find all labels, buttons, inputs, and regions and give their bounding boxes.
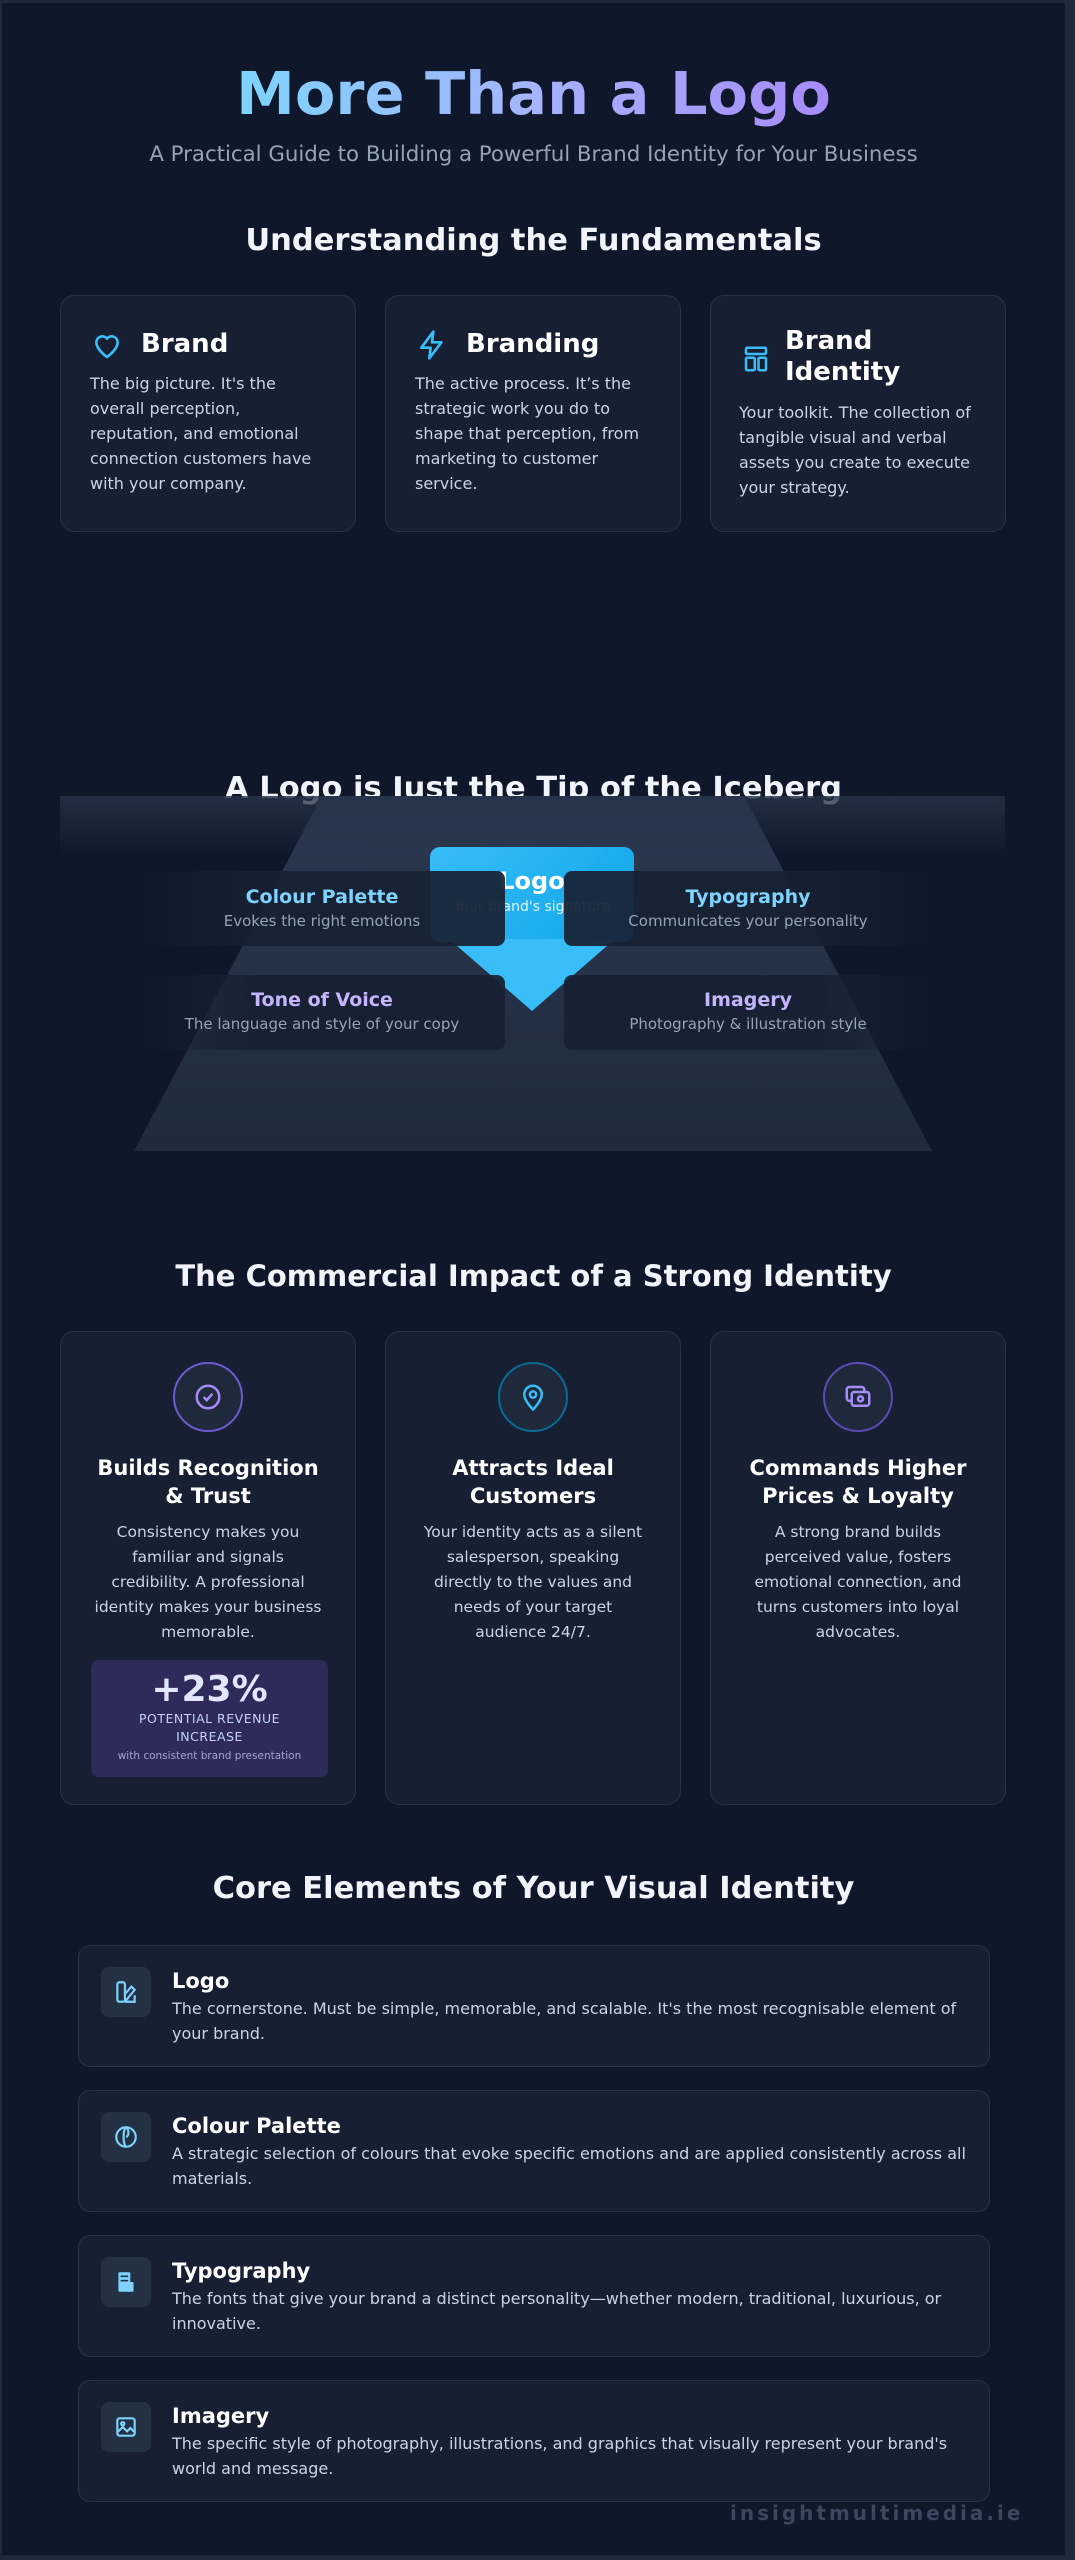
card: recognition: familiar and signals [132, 1548, 284, 1566]
item: colour palette: A strategic selection of colours that evoke specific emotions and are applied consistently across all materials. [172, 2144, 966, 2188]
logo tip: Logo [499, 867, 565, 895]
card: attracts customers: directly to the values and [434, 1573, 632, 1591]
stat box: with consistent brand presentation [118, 1750, 301, 1762]
item: imagery [78, 2380, 990, 2502]
icon: image [101, 2402, 151, 2452]
card: higher prices: Prices & Loyalty [762, 1484, 954, 1508]
icon: check circle [173, 1362, 243, 1432]
card: attracts customers: audience 24/7. [475, 1623, 591, 1641]
item: colour palette: Colour Palette [172, 2114, 341, 2138]
card: branding: The active process. It’s the strategic work you do to shape that perception, from marketing to customer service. [415, 374, 639, 493]
card: brand: Brand [141, 329, 228, 359]
icon: bolt [420, 330, 443, 360]
card: branding: Branding [466, 329, 599, 359]
heading: iceberg: A Logo is Just the Tip of the Iceberg [225, 771, 842, 806]
icon: map pin [498, 1362, 568, 1432]
icon: palette [101, 2112, 151, 2162]
arrow down [453, 939, 611, 1011]
card: brand [60, 295, 356, 532]
card: recognition [60, 1331, 356, 1805]
subtitle: A Practical Guide to Building a Powerful Brand Identity for Your Business [149, 142, 918, 167]
iceberg diagram: Typography [685, 886, 811, 908]
stat box: +23% [151, 1669, 268, 1710]
card: brand identity: Your toolkit. The collection of tangible visual and verbal assets you create to execute your strategy. [739, 403, 971, 497]
card: higher prices: turns customers into loyal [757, 1598, 959, 1616]
card: branding [385, 295, 681, 532]
card: higher prices [710, 1331, 1006, 1805]
card: attracts customers: Customers [470, 1484, 596, 1508]
iceberg diagram: Evokes the right emotions [224, 912, 420, 930]
item: logo: Logo [172, 1969, 229, 1993]
iceberg diagram: Colour Palette [246, 886, 398, 908]
item: logo [78, 1945, 990, 2067]
iceberg diagram: Photography & illustration style [629, 1015, 867, 1033]
card: attracts customers: salesperson, speaking [447, 1548, 619, 1566]
card: recognition: & Trust [165, 1484, 251, 1508]
icon: layout [744, 346, 768, 372]
title: More Than a Logo [236, 59, 831, 128]
card: attracts customers: needs of your target [454, 1598, 612, 1616]
card: recognition: memorable. [161, 1623, 255, 1641]
item: colour palette [78, 2090, 990, 2212]
card: recognition: identity makes your business [95, 1598, 321, 1616]
card: recognition: Consistency makes you [117, 1523, 299, 1541]
card: higher prices: emotional connection, and [755, 1573, 961, 1591]
iceberg diagram: Imagery [704, 989, 792, 1011]
stat box: POTENTIAL REVENUE [139, 1711, 280, 1726]
card: higher prices: A strong brand builds [775, 1523, 941, 1541]
heading: commercial impact: The Commercial Impact of a Strong Identity [175, 1259, 892, 1293]
item: imagery: Imagery [172, 2404, 269, 2428]
item: typography: Typography [172, 2259, 310, 2283]
card: recognition: Builds Recognition [97, 1456, 319, 1480]
label: tone of voice [137, 975, 505, 1050]
card: attracts customers: Your identity acts as a silent [424, 1523, 642, 1541]
heading: core elements: Core Elements of Your Visual Identity [213, 1871, 854, 1906]
iceberg diagram [60, 796, 1005, 1151]
watermark: insightmultimedia.ie [730, 2501, 1023, 2525]
card: brand: The big picture. It's the overall perception, reputation, and emotional connection customers have with your company. [90, 374, 311, 493]
card: brand identity [710, 295, 1006, 532]
iceberg diagram: The language and style of your copy [185, 1015, 459, 1033]
item: logo: The cornerstone. Must be simple, memorable, and scalable. It's the most recognisable element of your brand. [172, 1999, 956, 2043]
card: higher prices: perceived value, fosters [765, 1548, 951, 1566]
label: colour palette [137, 871, 505, 946]
card: attracts customers: Attracts Ideal [452, 1456, 614, 1480]
label: typography [564, 871, 934, 946]
icon: typography [101, 2257, 151, 2307]
card: higher prices: advocates. [816, 1623, 900, 1641]
heading: fundamentals: Understanding the Fundamentals [245, 223, 822, 258]
card: recognition: credibility. A professional [111, 1573, 305, 1591]
item: typography [78, 2235, 990, 2357]
icon: money [823, 1362, 893, 1432]
iceberg diagram: Tone of Voice [251, 989, 393, 1011]
card: higher prices: Commands Higher [750, 1456, 966, 1480]
stat box [91, 1660, 328, 1777]
iceberg diagram: Communicates your personality [628, 912, 868, 930]
card: attracts customers [385, 1331, 681, 1805]
card: brand identity: Brand [785, 326, 872, 356]
item: imagery: The specific style of photography, illustrations, and graphics that visually represent your brand's world and message. [172, 2434, 947, 2478]
card: brand identity: Identity [785, 357, 900, 387]
item: typography: The fonts that give your brand a distinct personality—whether modern, traditional, luxurious, or innovative. [172, 2289, 941, 2333]
logo tip [430, 847, 634, 942]
icon: heart [95, 335, 119, 358]
icon: logo [101, 1967, 151, 2017]
label: imagery [564, 975, 934, 1050]
logo tip: Your brand's signature [454, 899, 610, 915]
stat box: INCREASE [176, 1729, 243, 1744]
